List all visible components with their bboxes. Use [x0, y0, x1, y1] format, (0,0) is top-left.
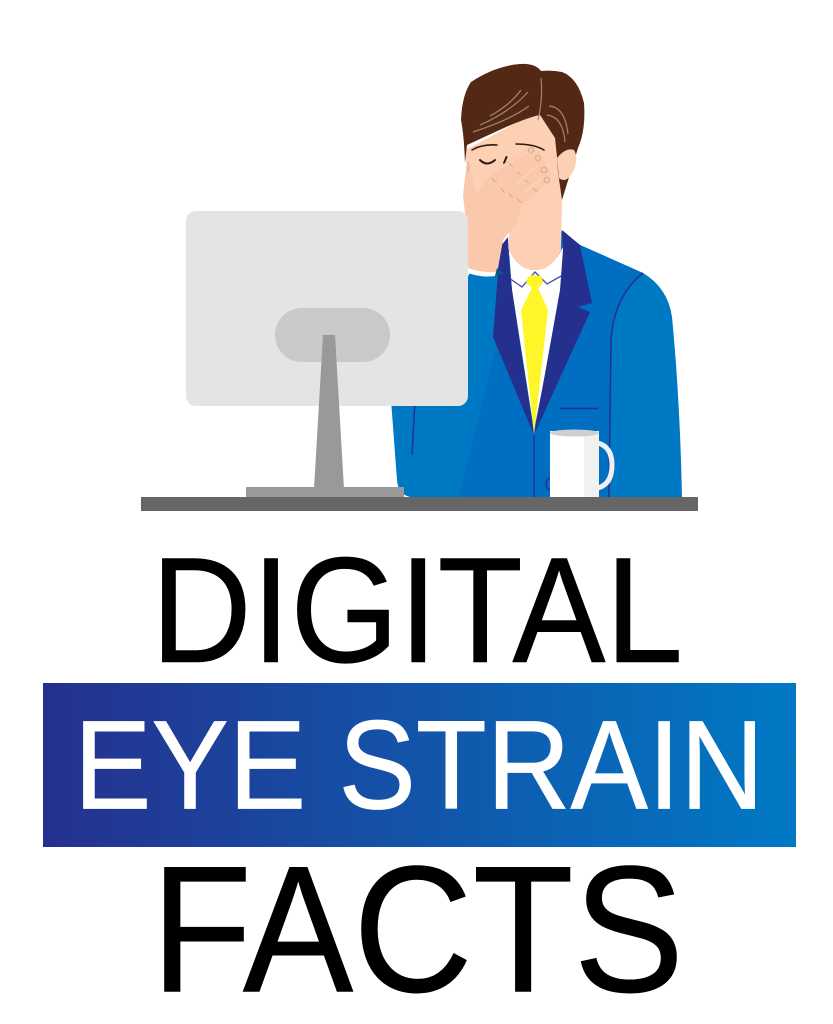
finger lines: [468, 148, 550, 202]
tie: [521, 275, 548, 435]
illustration: man rubbing eyes at computer: [141, 64, 698, 511]
banner: [43, 683, 796, 847]
monitor mount: [275, 308, 390, 362]
hand covering face: [463, 147, 551, 274]
banner text: EYE STRAIN: EYE STRAIN: [74, 694, 764, 835]
finger highlights: [497, 152, 543, 192]
desk: [141, 497, 698, 511]
mug: [550, 430, 612, 497]
banner background: [43, 683, 796, 847]
eye and eyebrows: [472, 144, 544, 164]
shirt cuff: [468, 268, 496, 277]
title: DIGITAL: DIGITAL: [151, 526, 683, 694]
shirt: [509, 247, 563, 430]
monitor: [186, 211, 468, 406]
shirt collar line: [509, 272, 563, 287]
jacket: [391, 231, 682, 497]
lapels: [493, 230, 592, 435]
cuff shadow: [495, 268, 504, 276]
hair: [461, 64, 584, 200]
ear: [557, 149, 576, 180]
monitor base: [246, 487, 404, 498]
hair highlights: [473, 78, 568, 142]
neck and face: [465, 112, 562, 270]
monitor stand: [314, 335, 344, 489]
